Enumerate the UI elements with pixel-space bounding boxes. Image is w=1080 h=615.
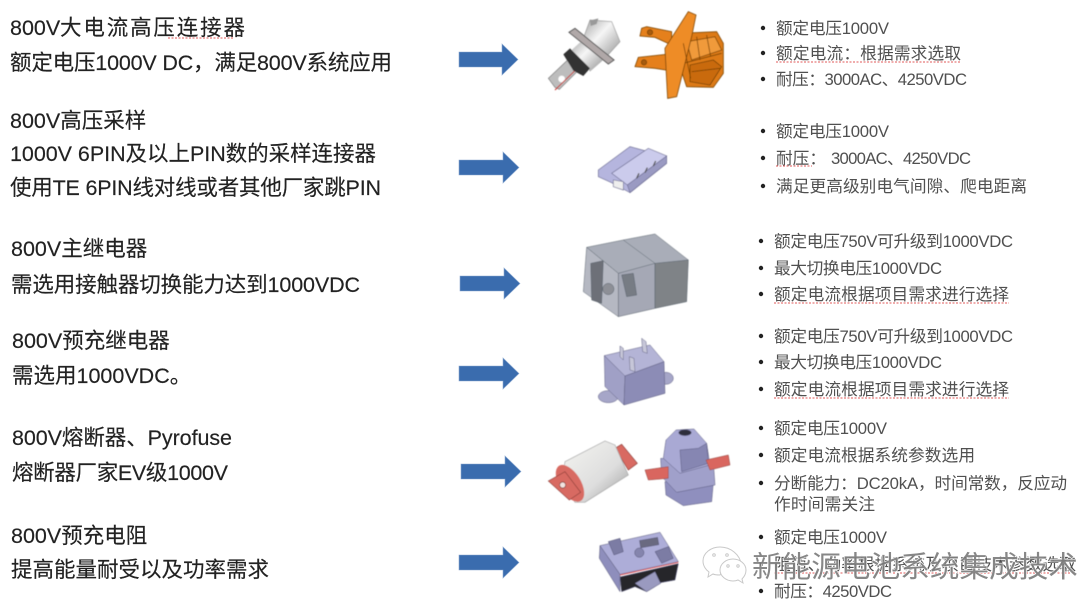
icon: watermark chat bubbles: [703, 547, 746, 583]
icon: sampling connector: [598, 147, 667, 193]
row 5 specs: [759, 419, 1067, 514]
icon: precharge relay: [598, 338, 673, 405]
arrow row 6: [459, 547, 519, 578]
icon: silver HV connector: [548, 18, 620, 90]
icon: orange HV connector: [635, 12, 723, 98]
row 6 specs: [759, 528, 1076, 601]
row 5 specs: 分断能力：DC20kA，时间常数，反应动: [774, 474, 1067, 493]
row 5 description: [12, 426, 232, 485]
icon: pyrofuse: [645, 429, 730, 506]
row 1 specs: 额定电流：根据需求选取: [776, 44, 961, 63]
row 3 description: 需选用接触器切换能力达到1000VDC: [11, 273, 360, 297]
row 1 description: 大电流高压连接器: [60, 16, 245, 40]
row 5 specs: 额定电流根据系统参数选用: [774, 446, 975, 465]
icon: precharge resistor: [599, 532, 678, 592]
row 3 specs: 额定电压750V可升级到1000VDC: [774, 232, 1013, 251]
arrow row 4: [459, 358, 519, 389]
arrow row 5: [461, 456, 521, 487]
row 1 specs: 耐压：3000AC、4250VDC: [776, 70, 967, 89]
row 4 description: 800V预充继电器: [12, 329, 170, 353]
row 2 description: 800V高压采样: [10, 109, 146, 133]
arrow row 2: [459, 152, 519, 183]
row 4 specs: 额定电压750V可升级到1000VDC: [774, 327, 1013, 346]
arrow row 3: [460, 268, 520, 299]
row 6 description: 800V预充电阻: [11, 524, 147, 548]
row 3 description: 800V主继电器: [11, 237, 147, 261]
row 2 specs: 额定电压1000V: [776, 122, 890, 141]
row 3 description: [11, 237, 360, 297]
row 4 specs: [759, 327, 1013, 399]
row 6 description: [11, 524, 269, 582]
row 5 specs: 额定电压1000V: [774, 419, 888, 438]
row 3 specs: 额定电流根据项目需求进行选择: [774, 285, 1009, 304]
row 5 description: 熔断器厂家EV级1000V: [12, 461, 229, 485]
row 4 specs: 额定电流根据项目需求进行选择: [774, 380, 1009, 399]
row 1 description: [10, 16, 392, 75]
row 4 specs: 最大切换电压1000VDC: [774, 353, 942, 372]
row 6 specs: 额定电压1000V: [774, 528, 888, 547]
row 6 specs: 耐压：4250VDC: [774, 582, 892, 601]
row 4 description: 需选用1000VDC。: [12, 364, 191, 388]
row 4 description: [12, 329, 191, 388]
row 1 description: 额定电压1000V DC，满足800V系统应用: [10, 51, 392, 75]
icon: fuse: [548, 441, 637, 507]
row 2 description: 使用TE 6PIN线对线或者其他厂家跳PIN: [10, 176, 381, 200]
row 2 specs: [761, 122, 1027, 196]
row 5 specs: 作时间需关注: [774, 495, 875, 514]
row 2 specs: 3000AC、4250VDC: [831, 149, 971, 168]
row 3 specs: [759, 232, 1013, 304]
row 6 description: 提高能量耐受以及功率需求: [11, 558, 269, 582]
arrow row 1: [459, 44, 518, 75]
row 2 description: 1000V 6PIN及以上PIN数的采样连接器: [10, 142, 376, 166]
row 5 description: 800V熔断器、Pyrofuse: [12, 426, 232, 450]
row 2 specs: 满足更高级别电气间隙、爬电距离: [776, 177, 1027, 196]
watermark text: 新能源电池系统集成技术: [752, 551, 1078, 584]
row 1 specs: [761, 19, 967, 89]
row 2 description: [10, 109, 381, 200]
row 1 description: 800V: [10, 16, 61, 40]
row 3 specs: 最大切换电压1000VDC: [774, 259, 942, 278]
row 6 specs: 阻值、功率根据系统及项目技术参数选取: [774, 555, 1076, 574]
row 1 specs: 额定电压1000V: [776, 19, 890, 38]
row 2 specs: 耐压：: [776, 149, 826, 168]
icon: main relay: [583, 234, 688, 317]
